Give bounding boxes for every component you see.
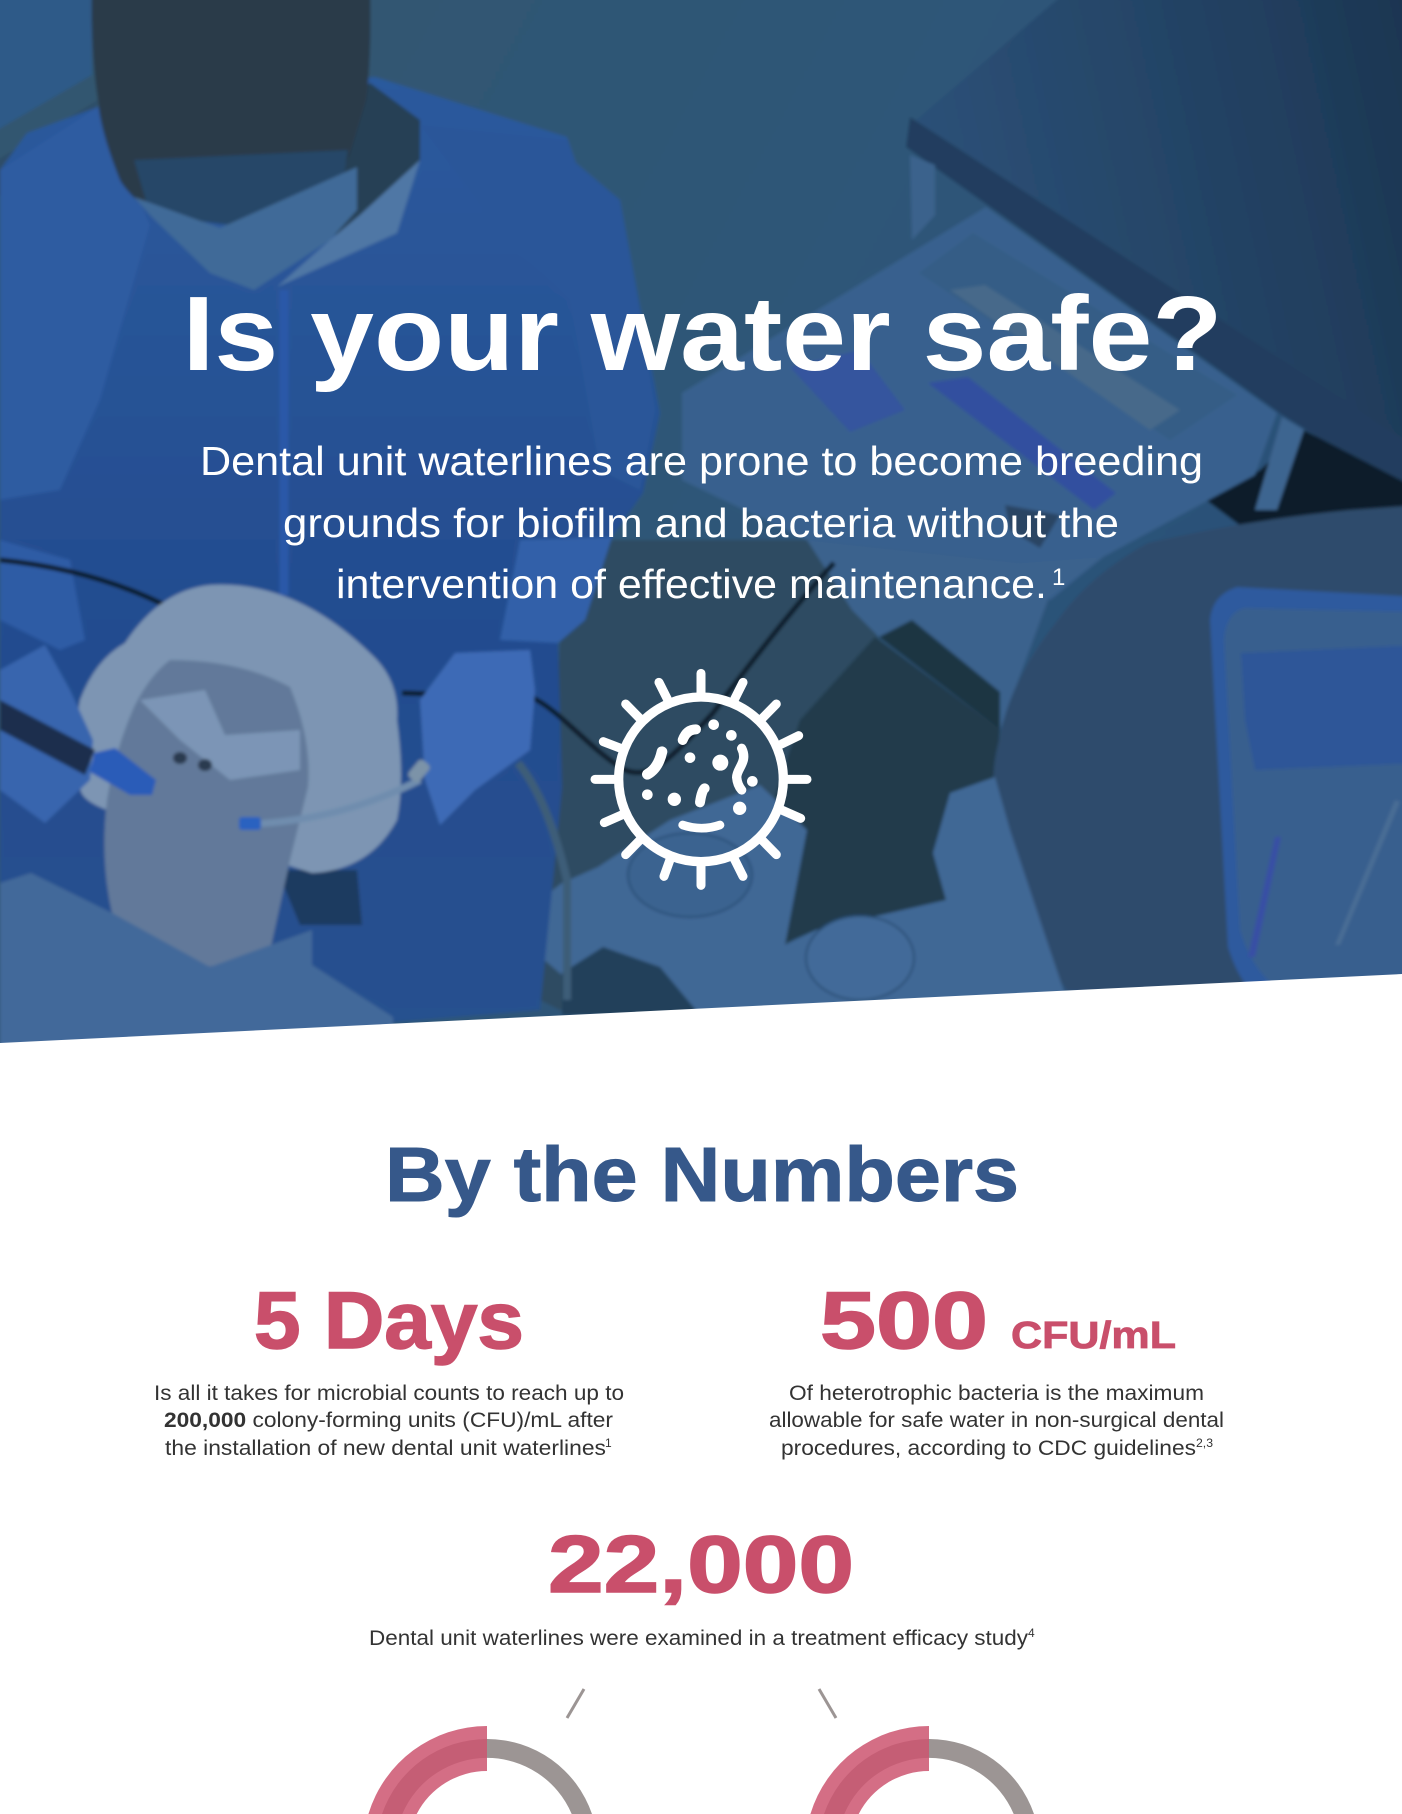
hero photo: dentist treating a patient — [0, 0, 1402, 1060]
donut chart left — [368, 1726, 592, 1814]
stat value: 5 Days — [254, 1276, 524, 1366]
hero intro text — [200, 438, 1203, 607]
stat description: 1 — [605, 1436, 612, 1450]
stat description: 4 — [1028, 1626, 1035, 1640]
stat: 22,000 — [369, 1520, 1035, 1650]
stat unit: CFU/mL — [1011, 1315, 1176, 1357]
stat: 500 CFU/mL — [769, 1276, 1224, 1460]
stat description — [769, 1381, 1224, 1460]
hero intro text: 1 — [1052, 564, 1065, 591]
icon: bacteria / microbe — [595, 673, 807, 885]
stat description: 200,000 colony-forming units (CFU)/mL after — [164, 1408, 613, 1432]
stat description: the installation of new dental unit waterlines — [165, 1436, 606, 1460]
stat description — [154, 1381, 624, 1460]
connector line left — [567, 1689, 584, 1718]
stat description: Is all it takes for microbial counts to reach up to — [154, 1381, 624, 1405]
hero heading: Is your water safe? — [182, 275, 1222, 393]
stat description: Dental unit waterlines were examined in a treatment efficacy study — [369, 1626, 1028, 1650]
stat description: allowable for safe water in non-surgical dental — [769, 1408, 1224, 1432]
stat value: 500 — [820, 1276, 988, 1366]
stat description: 2,3 — [1196, 1436, 1213, 1450]
hero intro text: Dental unit waterlines are prone to become breeding — [200, 438, 1203, 484]
connector line right — [819, 1689, 836, 1718]
hero intro text: intervention of effective maintenance. — [336, 561, 1047, 607]
section heading: By the Numbers: By the Numbers — [385, 1132, 1019, 1218]
stat: 5 Days — [154, 1276, 624, 1460]
stat description: Of heterotrophic bacteria is the maximum — [789, 1381, 1204, 1405]
stat description: procedures, according to CDC guidelines — [781, 1436, 1196, 1460]
stat value: 22,000 — [548, 1520, 854, 1610]
hero intro text: grounds for biofilm and bacteria without the — [283, 500, 1119, 546]
donut chart right — [810, 1726, 1034, 1814]
